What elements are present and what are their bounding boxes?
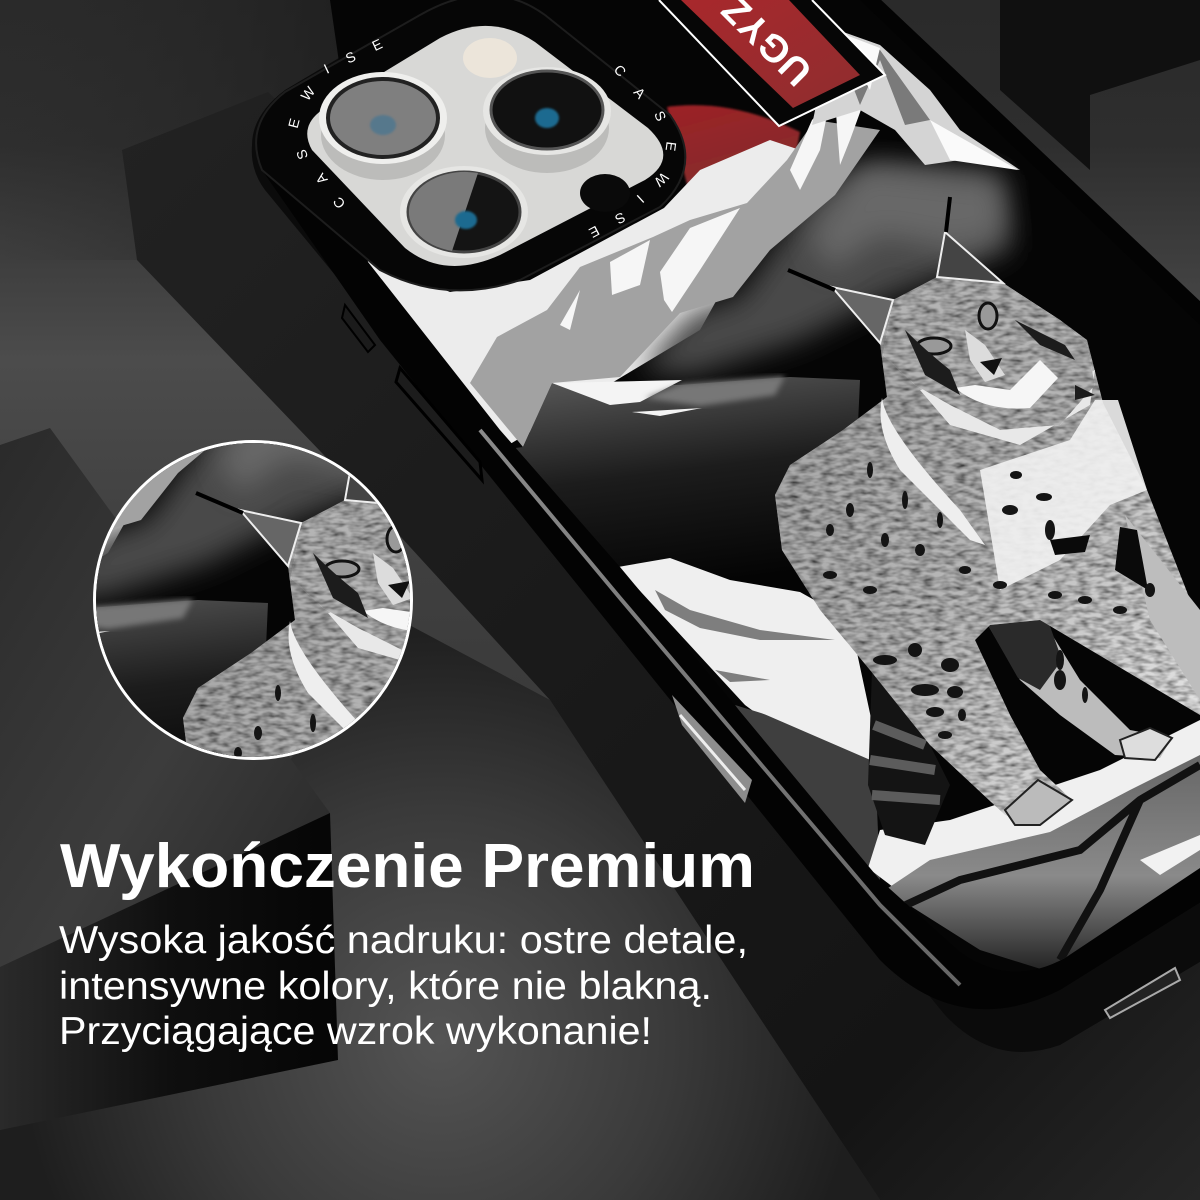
peak dark strokes	[854, 50, 930, 125]
face markings	[905, 320, 1095, 400]
rock cracks	[895, 765, 1200, 960]
side buttons	[342, 305, 1180, 1018]
lynx rear leg	[988, 626, 1168, 758]
bottom port	[1105, 968, 1180, 1018]
brand ring text left: CASEWISE	[288, 39, 383, 208]
snow field grey strokes	[655, 590, 835, 682]
tail stripes	[870, 725, 940, 800]
camera island	[255, 0, 686, 292]
lynx body	[775, 197, 1200, 825]
ear tufts	[788, 197, 950, 290]
lynx tail	[868, 670, 950, 845]
left eye	[917, 338, 951, 354]
phone case body	[252, 0, 1200, 1052]
left ear	[832, 287, 893, 343]
phone front bezel	[262, 0, 1200, 1009]
lens 2	[483, 67, 611, 173]
case gloss highlight	[480, 430, 960, 985]
muzzle	[955, 360, 1058, 409]
snow strip slope	[762, 713, 869, 760]
snowy peak	[812, 28, 1020, 170]
black label back	[774, 28, 884, 125]
lynx rear leg shade	[988, 620, 1059, 690]
chest highlight	[980, 400, 1147, 590]
nose	[980, 358, 1002, 375]
artwork panel	[300, 0, 1200, 1000]
background: lower left step top	[0, 428, 330, 967]
lens 3	[400, 166, 528, 258]
camera glass plate	[307, 26, 663, 266]
nose bridge	[965, 330, 1005, 382]
lower dark mountain	[500, 377, 860, 600]
white snow plain	[360, 140, 800, 450]
right ear	[937, 232, 1003, 283]
ledge white snow	[552, 380, 702, 416]
rocks snow	[868, 720, 1200, 900]
peak snow	[838, 32, 1018, 170]
inset lynx view	[0, 203, 628, 1200]
background: lower left step front	[0, 813, 338, 1130]
description text: Wysoka jakość nadruku: ostre detale,	[59, 919, 748, 962]
microphone hole	[580, 174, 630, 212]
upper dark mountain	[640, 165, 1010, 375]
mountain white streaks	[560, 110, 861, 330]
brand ring text right: CASEWISE	[588, 66, 676, 238]
dark foreground slope	[735, 705, 880, 880]
label outline frame	[659, 0, 885, 126]
head	[883, 278, 1095, 430]
description text: intensywne kolory, które nie blakną.	[59, 965, 712, 1008]
rock snow patch	[1140, 835, 1200, 875]
background: top dark shade	[0, 0, 520, 260]
front paw	[1005, 780, 1072, 825]
description text: Przyciągające wzrok wykonanie!	[59, 1010, 652, 1053]
grey mountain range	[470, 120, 880, 447]
rear paw	[1120, 728, 1172, 760]
grey mist	[810, 165, 1005, 270]
shoulder line	[880, 398, 985, 545]
right leg	[1125, 515, 1200, 700]
background: floor light pool	[0, 620, 880, 1200]
mane	[920, 370, 1095, 445]
description text	[59, 919, 748, 1053]
foreground rock	[885, 755, 1200, 975]
snow field lower	[620, 558, 870, 742]
silver side button	[672, 695, 752, 803]
red label	[681, 0, 860, 108]
ledge grey mist	[645, 376, 785, 406]
title: Wykończenie Premium	[60, 832, 755, 901]
spots	[823, 462, 1155, 739]
red sun	[667, 105, 800, 196]
right eye	[979, 303, 997, 329]
black wedge	[1050, 527, 1148, 590]
inset detail circle	[0, 203, 628, 1200]
lens 1	[319, 72, 447, 180]
background: top right blocks	[1000, 0, 1200, 170]
flash	[463, 38, 517, 78]
